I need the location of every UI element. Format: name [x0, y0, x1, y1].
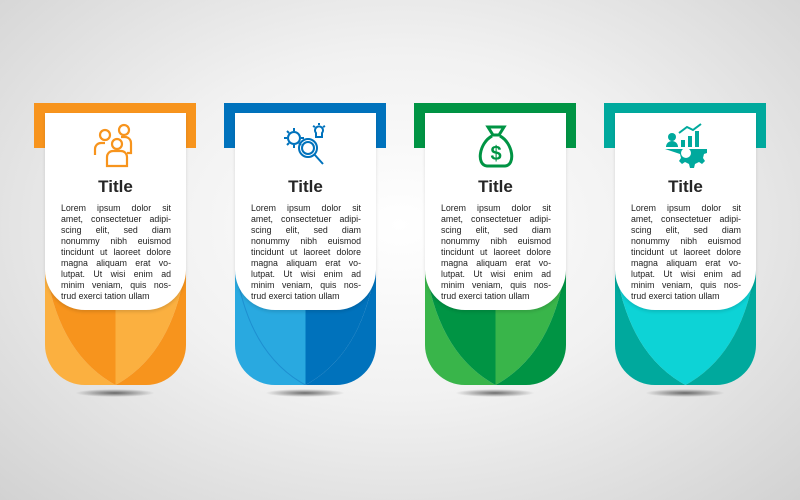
text — [251, 203, 361, 301]
text: magna aliquam erat vo- — [251, 258, 361, 268]
card 1: orange — [34, 103, 196, 396]
text: lutpat. Ut wisi enim ad — [441, 269, 551, 279]
shadow — [645, 389, 725, 397]
title: Title — [478, 177, 513, 196]
icon: gear growth — [665, 123, 707, 168]
text: Lorem ipsum dolor sit — [441, 203, 551, 213]
text: tincidunt ut laoreet dolore — [251, 247, 361, 257]
text: nonummy nibh euismod — [251, 236, 361, 246]
text: nonummy nibh euismod — [631, 236, 741, 246]
icon: people — [94, 124, 132, 168]
text — [61, 203, 171, 301]
text: minim veniam, quis nos- — [61, 280, 171, 290]
icon: money bag: $ — [490, 143, 502, 165]
text: nonummy nibh euismod — [61, 236, 171, 246]
text: scing elit, sed diam — [251, 225, 361, 235]
shadow — [265, 389, 345, 397]
text: minim veniam, quis nos- — [441, 280, 551, 290]
shadow — [455, 389, 535, 397]
text: Lorem ipsum dolor sit — [631, 203, 741, 213]
text: magna aliquam erat vo- — [61, 258, 171, 268]
text: tincidunt ut laoreet dolore — [61, 247, 171, 257]
text: minim veniam, quis nos- — [251, 280, 361, 290]
text: scing elit, sed diam — [61, 225, 171, 235]
text: lutpat. Ut wisi enim ad — [631, 269, 741, 279]
text: magna aliquam erat vo- — [441, 258, 551, 268]
text — [441, 203, 551, 301]
text: trud exerci tation ullam — [61, 291, 150, 301]
blue top bar — [224, 103, 386, 148]
text: scing elit, sed diam — [441, 225, 551, 235]
card 3: green — [414, 103, 576, 396]
text: tincidunt ut laoreet dolore — [631, 247, 741, 257]
blue lower body — [235, 270, 376, 385]
text: trud exerci tation ullam — [251, 291, 340, 301]
icon: money bag — [478, 126, 514, 168]
text: minim veniam, quis nos- — [631, 280, 741, 290]
shadow — [75, 389, 155, 397]
green lower body — [425, 270, 566, 385]
teal lower body — [615, 270, 756, 385]
text: amet, consectetuer adipi- — [61, 214, 171, 224]
white panel — [235, 113, 376, 310]
green top bar — [414, 103, 576, 148]
card 2: blue — [224, 103, 386, 396]
text: Lorem ipsum dolor sit — [251, 203, 361, 213]
text: nonummy nibh euismod — [441, 236, 551, 246]
teal top bar — [604, 103, 766, 148]
white panel — [615, 113, 756, 310]
orange top bar — [34, 103, 196, 148]
text: lutpat. Ut wisi enim ad — [61, 269, 171, 279]
title: Title — [288, 177, 323, 196]
white panel — [425, 113, 566, 310]
orange lower body — [45, 270, 186, 385]
title: Title — [668, 177, 703, 196]
text: scing elit, sed diam — [631, 225, 741, 235]
white panel — [45, 113, 186, 310]
text: magna aliquam erat vo- — [631, 258, 741, 268]
title: Title — [98, 177, 133, 196]
text: trud exerci tation ullam — [441, 291, 530, 301]
card 4: teal — [604, 103, 766, 396]
text: trud exerci tation ullam — [631, 291, 720, 301]
text — [631, 203, 741, 301]
text: Lorem ipsum dolor sit — [61, 203, 171, 213]
text: tincidunt ut laoreet dolore — [441, 247, 551, 257]
text: amet, consectetuer adipi- — [441, 214, 551, 224]
text: amet, consectetuer adipi- — [251, 214, 361, 224]
icon: gear search idea — [284, 123, 326, 165]
text: lutpat. Ut wisi enim ad — [251, 269, 361, 279]
text: amet, consectetuer adipi- — [631, 214, 741, 224]
